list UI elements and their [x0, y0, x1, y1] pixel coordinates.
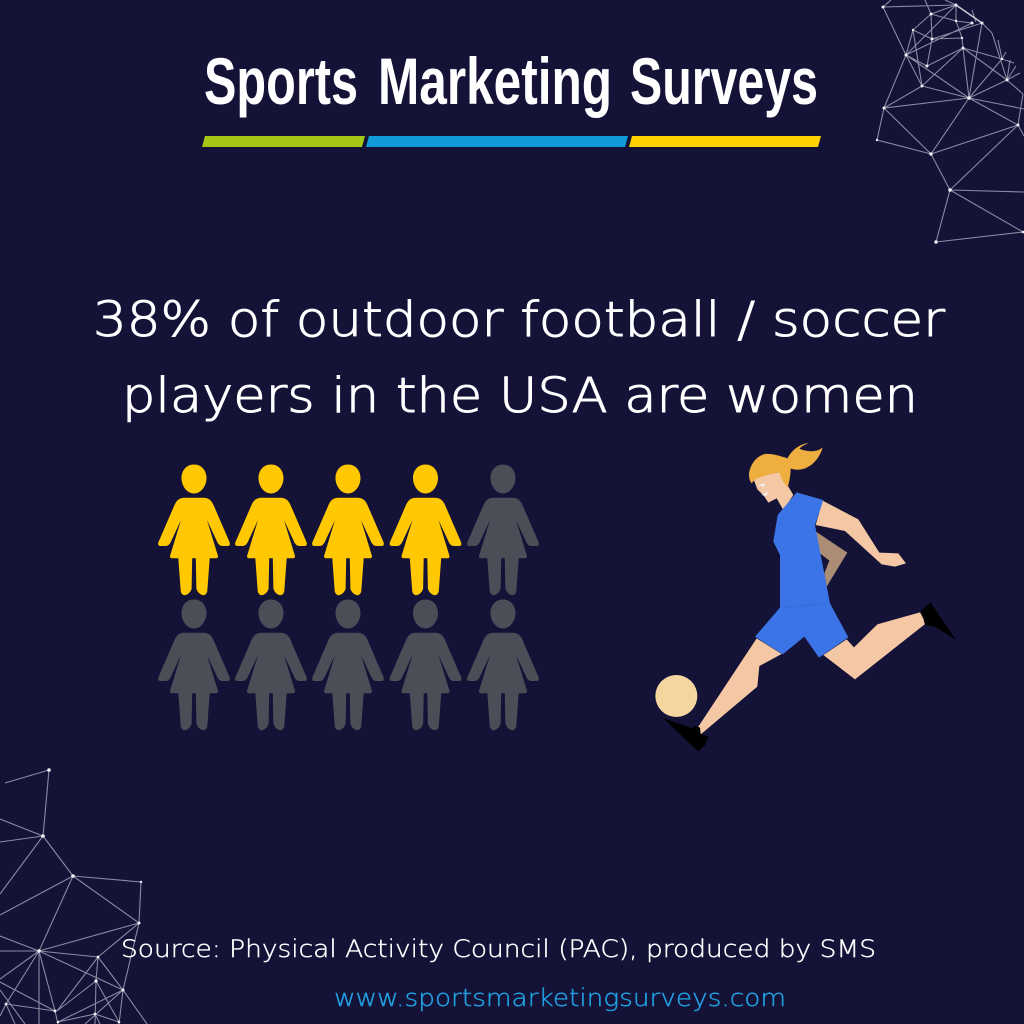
word: Surveys: Surveys: [630, 44, 818, 118]
icon: woman grey 7: [235, 600, 307, 730]
logo wordmark: [204, 44, 818, 118]
icon: woman grey 5: [467, 464, 539, 595]
decoration: network top right: [877, 0, 1024, 242]
rear shoe: [921, 603, 956, 640]
decoration: network bottom left nodes: [5, 768, 142, 1023]
blue bar: [366, 136, 628, 147]
headline line 1: 38% of outdoor football / soccer: [93, 292, 945, 348]
decoration: network bottom left: [0, 770, 147, 1024]
source note: Source: Physical Activity Council (PAC), produced by SMS: [121, 935, 876, 963]
icon: woman highlighted 2: [235, 464, 307, 595]
website: www.sportsmarketingsurveys.com: [334, 984, 786, 1012]
icon: woman grey 8: [312, 600, 384, 730]
yellow bar: [629, 136, 821, 147]
icon: woman highlighted 4: [390, 464, 461, 595]
word: Sports: Sports: [204, 44, 358, 118]
ball: [655, 675, 697, 717]
decoration: network top right nodes: [876, 4, 1024, 244]
icon: woman highlighted 1: [158, 464, 230, 595]
front arm: [816, 501, 906, 567]
rear leg: [823, 612, 926, 679]
neck and face: [753, 467, 793, 510]
headline: [93, 292, 945, 424]
illustration: woman kicking a soccer ball: [655, 443, 956, 752]
hair: [749, 443, 823, 487]
green bar: [202, 136, 365, 147]
front shoe: [663, 718, 708, 752]
icon: woman grey 9: [390, 600, 461, 730]
icon: woman highlighted 3: [312, 464, 384, 595]
shorts: [755, 603, 848, 658]
pictogram: 4 of 10 women highlighted: [158, 464, 539, 730]
headline line 2: players in the USA are women: [122, 368, 918, 424]
shirt: [773, 492, 830, 608]
front leg: [698, 638, 782, 735]
icon: woman grey 6: [158, 600, 230, 730]
logo colour bars: [202, 136, 821, 147]
back arm: [815, 531, 847, 587]
icon: woman grey 10: [467, 600, 539, 730]
word: Marketing: Marketing: [378, 44, 612, 118]
eye and smile: [758, 483, 768, 496]
